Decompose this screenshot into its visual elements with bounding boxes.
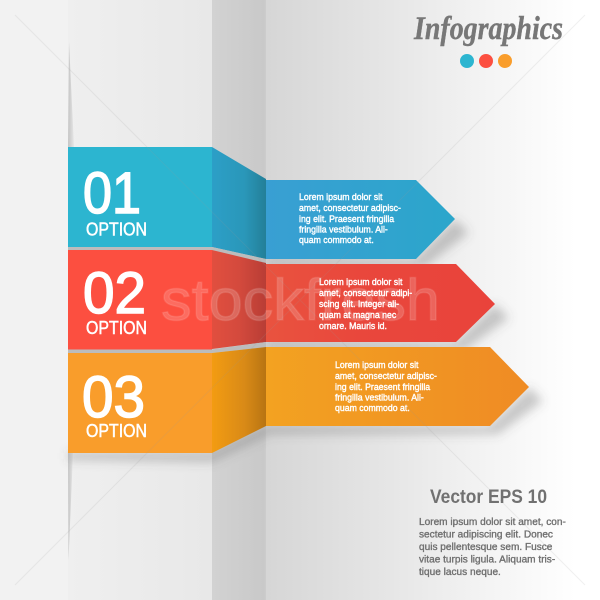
heading: vector eps 10: Vector EPS 10 <box>430 486 547 508</box>
option 02 block <box>68 250 212 350</box>
arrow text 03: Lorem ipsum dolor sit <box>335 360 419 370</box>
arrow text 01: Lorem ipsum dolor sit <box>299 192 383 202</box>
panel: option 01 <box>68 147 455 259</box>
panel: option 03 <box>68 347 529 453</box>
option 01 block <box>68 147 212 247</box>
arrow text 02: quam at magna nec <box>319 310 397 320</box>
body text: sectetur adipiscing elit. Donec <box>419 529 553 541</box>
arrow text 01: fringilla vestibulum. Ali- <box>299 224 388 235</box>
body text: tique lacus neque. <box>419 567 501 578</box>
arrow text 03: fringilla vestibulum. Ali- <box>335 392 424 403</box>
watermark: stockfresh <box>161 268 440 333</box>
gap shadow 01-02 <box>68 247 266 264</box>
arrow text 01: amet, consectetur adipisc- <box>299 203 401 213</box>
fold band 03 <box>212 347 266 453</box>
gap shadow 02-03 <box>68 342 266 353</box>
slit bottom <box>68 453 73 560</box>
slit top <box>68 42 74 147</box>
fold band 01 <box>212 147 266 259</box>
arrow text 02: Lorem ipsum dolor sit <box>319 277 403 287</box>
number 03: 03 <box>82 365 145 430</box>
arrow text 02: ornare. Mauris id. <box>319 321 387 331</box>
arrow text 01: ing elit. Praesent fringilla <box>299 214 395 224</box>
colour dots <box>460 54 512 68</box>
body text: vitae turpis ligula. Aliquam tris- <box>419 554 555 566</box>
option label 02: OPTION <box>86 318 147 338</box>
body text: quis pellentesque sem. Fusce <box>419 542 553 553</box>
arrow text 03: amet, consectetur adipisc- <box>335 371 437 381</box>
arrow text 01: quam commodo at. <box>299 235 374 245</box>
arrow 01 <box>266 180 455 259</box>
arrow text 03: quam commodo at. <box>335 403 410 413</box>
body text: Lorem ipsum dolor sit amet, con- <box>419 517 566 528</box>
panel: option 02 <box>68 250 495 350</box>
option 03 block <box>68 353 212 453</box>
arrow text 02: amet, consectetur adipi- <box>319 288 412 298</box>
fold band 02 <box>212 250 266 349</box>
arrow 02 <box>266 264 495 342</box>
number 02: 02 <box>83 261 146 326</box>
number 01: 01 <box>83 161 141 226</box>
title: Infographics <box>413 11 563 47</box>
arrow text 03: ing elit. Praesent fringilla <box>335 382 431 392</box>
option label 03: OPTION <box>86 421 147 441</box>
option label 01: OPTION <box>86 220 147 240</box>
drop shadows <box>68 219 543 462</box>
arrow text 02: scing elit. Integer ali- <box>319 299 399 309</box>
arrow 03 <box>266 347 529 426</box>
